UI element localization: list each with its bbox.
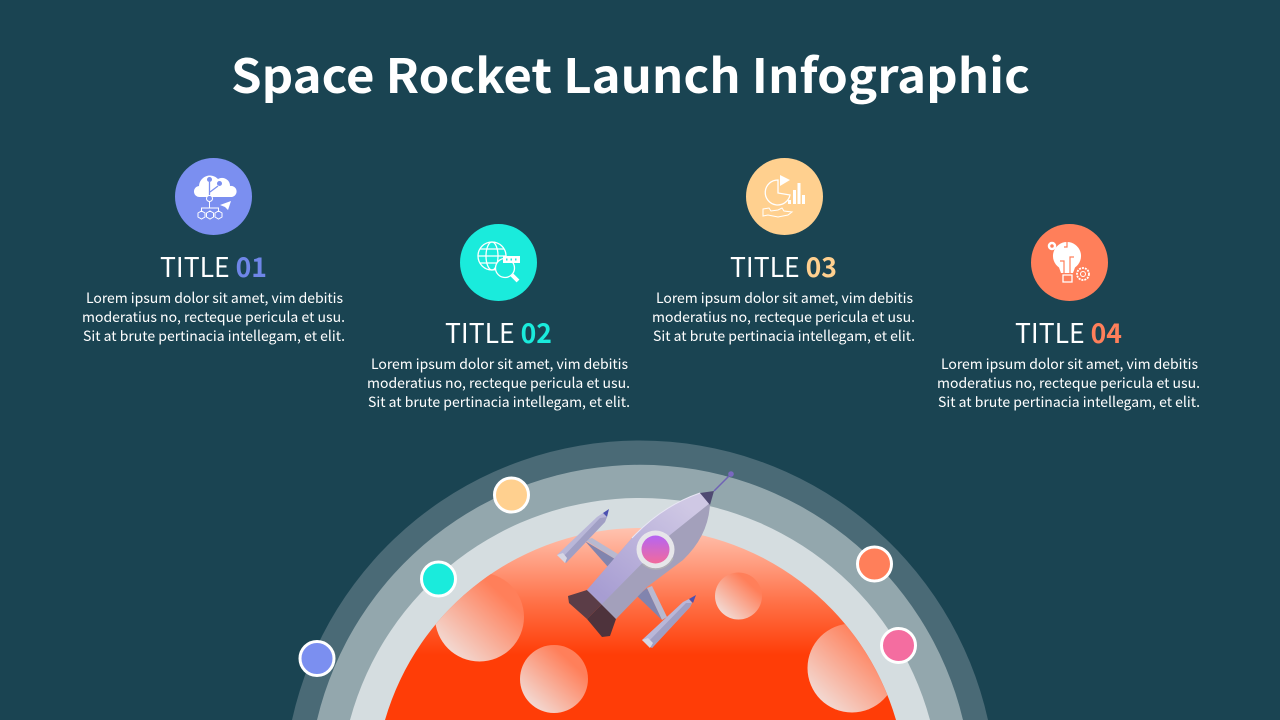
panel: title 04 xyxy=(937,224,1200,412)
rocket xyxy=(557,471,734,648)
heading: TITLE 04 xyxy=(1015,312,1122,351)
text block xyxy=(937,354,1200,412)
panel: title 02 xyxy=(367,224,630,412)
text block xyxy=(82,288,345,346)
text block: Lorem ipsum dolor sit amet, vim debitis xyxy=(656,288,913,308)
icon: cloud network xyxy=(175,158,252,235)
text block: moderatius no, recteque pericula et usu. xyxy=(937,373,1200,393)
text block: Sit at brute pertinacia intellegam, et elit. xyxy=(83,326,345,346)
text block: Sit at brute pertinacia intellegam, et elit. xyxy=(653,326,915,346)
window xyxy=(636,530,674,569)
heading: TITLE 02 xyxy=(445,312,552,351)
text block: Sit at brute pertinacia intellegam, et elit. xyxy=(938,392,1200,412)
exhaust xyxy=(568,590,616,637)
heading: TITLE 03 xyxy=(730,246,837,285)
planet with rings xyxy=(292,441,988,720)
body xyxy=(587,491,714,619)
text block: Lorem ipsum dolor sit amet, vim debitis xyxy=(371,354,628,374)
panel: title 03 xyxy=(652,158,915,346)
marker: pink xyxy=(882,628,916,662)
marker: peach xyxy=(494,478,528,512)
icon: charts in hand xyxy=(746,158,823,235)
text block: Lorem ipsum dolor sit amet, vim debitis xyxy=(941,354,1198,374)
craters xyxy=(435,572,896,713)
marker: blue xyxy=(300,642,334,676)
heading: TITLE 01 xyxy=(160,246,267,285)
lower fin xyxy=(637,586,696,648)
marker: teal xyxy=(422,562,456,596)
text block: moderatius no, recteque pericula et usu. xyxy=(367,373,630,393)
title: Space Rocket Launch Infographic xyxy=(231,38,1030,107)
text block: moderatius no, recteque pericula et usu. xyxy=(652,307,915,327)
text block: moderatius no, recteque pericula et usu. xyxy=(82,307,345,327)
text block xyxy=(367,354,630,412)
icon: globe search xyxy=(460,224,537,301)
panel: title 01 xyxy=(82,158,345,346)
text block xyxy=(652,288,915,346)
text block: Lorem ipsum dolor sit amet, vim debitis xyxy=(86,288,343,308)
icon: light bulb with gears xyxy=(1031,224,1108,301)
upper fin xyxy=(557,509,618,567)
marker: coral xyxy=(858,547,892,581)
text block: Sit at brute pertinacia intellegam, et elit. xyxy=(368,392,630,412)
